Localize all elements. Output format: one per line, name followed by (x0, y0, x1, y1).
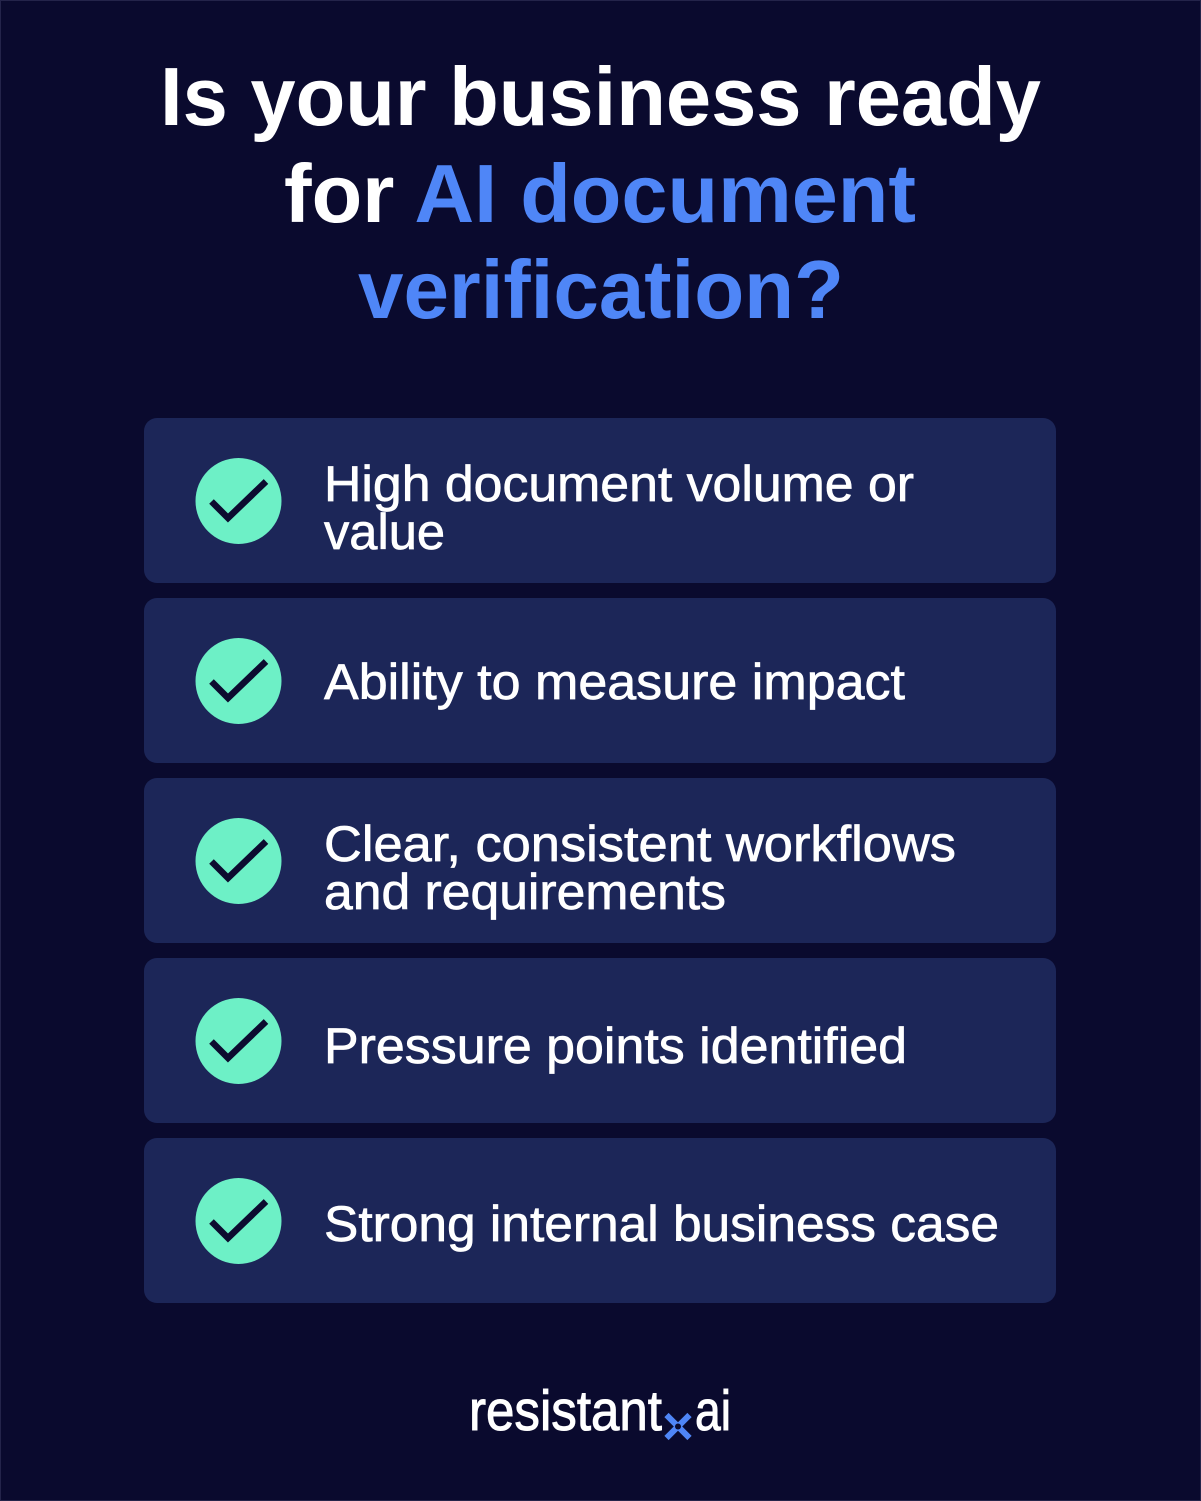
item text (324, 816, 956, 920)
icon: check circle (196, 458, 282, 544)
icon: check circle (196, 638, 282, 724)
icon: logo cross (666, 1415, 690, 1438)
panel: strong internal business case (144, 1138, 1056, 1303)
item text (324, 456, 914, 560)
icon: check circle (196, 818, 282, 904)
logo: resistant ai: resistant (469, 1379, 662, 1443)
icon: check circle (196, 1178, 282, 1264)
panel: clear workflows and requirements (144, 778, 1056, 943)
title: for AI document (284, 147, 916, 240)
item text: and requirements (324, 864, 726, 920)
panel: high document volume or value (144, 418, 1056, 583)
panel: pressure points identified (144, 958, 1056, 1123)
title (160, 50, 1041, 336)
item text: Clear, consistent workflows (324, 816, 956, 872)
item text: Ability to measure impact (324, 654, 905, 710)
item text: value (324, 504, 445, 560)
item text: Strong internal business case (324, 1196, 999, 1252)
item text: Pressure points identified (324, 1018, 907, 1074)
icon: check circle (196, 998, 282, 1084)
title: Is your business ready (160, 50, 1041, 143)
logo: resistant ai: ai (695, 1379, 731, 1443)
item text: High document volume or (324, 456, 914, 512)
title: verification? (358, 243, 844, 336)
panel: ability to measure impact (144, 598, 1056, 763)
